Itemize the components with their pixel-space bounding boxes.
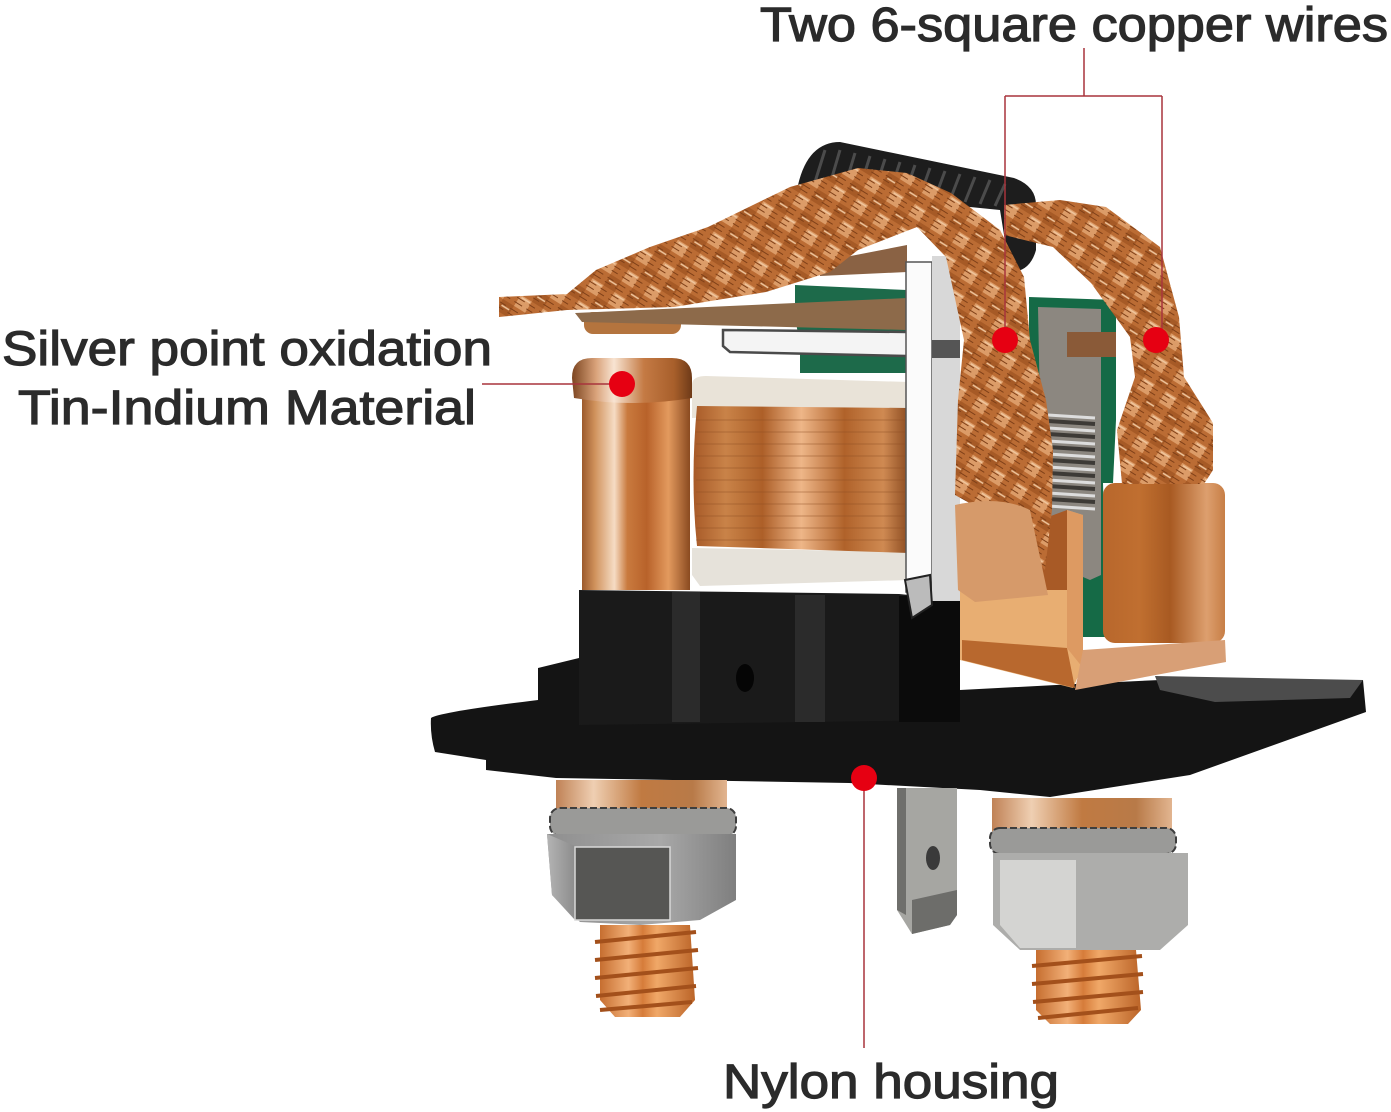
green circuit board (795, 285, 1116, 637)
braided copper wire: long (499, 168, 1053, 570)
grey contact plate (1038, 307, 1101, 580)
lower silver arm (723, 330, 907, 356)
marker right (1143, 327, 1169, 353)
black spring on top (798, 142, 1036, 272)
callout: two copper wires (760, 0, 1388, 353)
right terminal post (990, 798, 1188, 1024)
center blade terminal (897, 788, 957, 934)
upper contact arm (575, 298, 907, 330)
lower copper bracket (960, 483, 1226, 690)
housing hole (736, 664, 754, 692)
left terminal post (547, 780, 736, 1017)
copper contact stub (1067, 332, 1116, 357)
label: Nylon housing (723, 1056, 1059, 1109)
copper weld block (955, 501, 1048, 602)
label line two: Tin-Indium Material (18, 382, 476, 435)
leader line (482, 383, 622, 385)
silver bracket (905, 256, 960, 618)
callout: nylon housing (723, 765, 1059, 1109)
base plate (431, 658, 1366, 797)
plate top surface (1155, 676, 1363, 702)
white bobbin (692, 376, 909, 418)
leader lines (1005, 48, 1162, 340)
copper coil (694, 406, 909, 553)
marker left (992, 327, 1018, 353)
copper puck (584, 312, 681, 334)
marker (609, 371, 635, 397)
icon: relay product illustration (431, 142, 1366, 1024)
housing shading (672, 592, 825, 722)
braided copper wire: short (1004, 200, 1213, 484)
label line one: Silver point oxidation (2, 323, 492, 376)
callout: silver point material (2, 323, 635, 435)
black housing block (579, 590, 960, 725)
marker (851, 765, 877, 791)
return spring (1048, 415, 1095, 509)
brown support strip (820, 245, 907, 276)
copper cylinder terminal (572, 358, 692, 590)
leader line (863, 778, 865, 1048)
heading: Two 6-square copper wires (760, 0, 1388, 52)
